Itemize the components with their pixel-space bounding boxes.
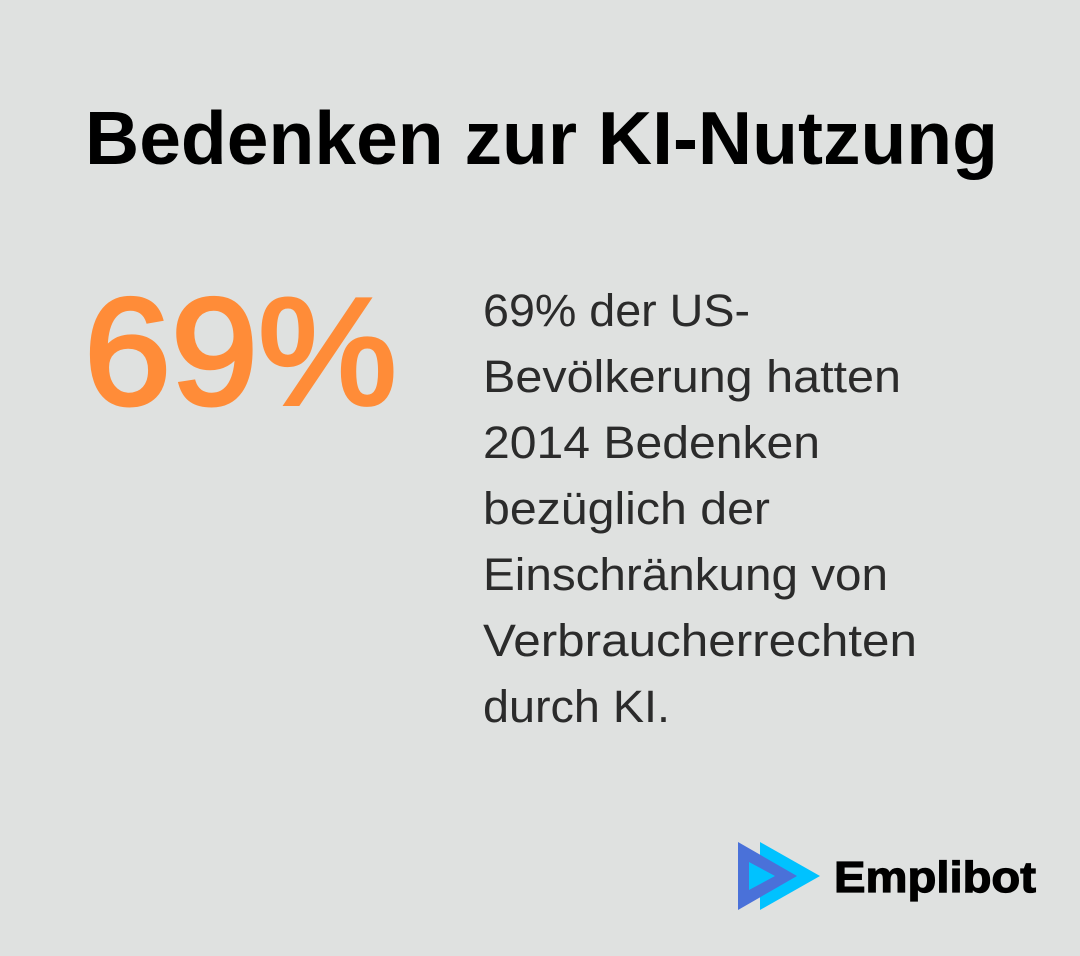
title: Bedenken zur KI-Nutzung [85,96,998,180]
description text: Bevölkerung hatten [483,351,901,402]
description text: bezüglich der [483,483,770,534]
description text: 69% der US- [483,285,750,336]
icon: play triangles [738,842,820,910]
description text: Einschränkung von [483,549,888,600]
description text [483,285,917,732]
description text: 2014 Bedenken [483,417,820,468]
logo: Emplibot [738,842,1036,910]
big statistic: 69%: 69% [84,267,397,437]
logo wordmark: Emplibot [834,853,1036,902]
description text: Verbraucherrechten [483,615,917,666]
description text: durch KI. [483,681,670,732]
